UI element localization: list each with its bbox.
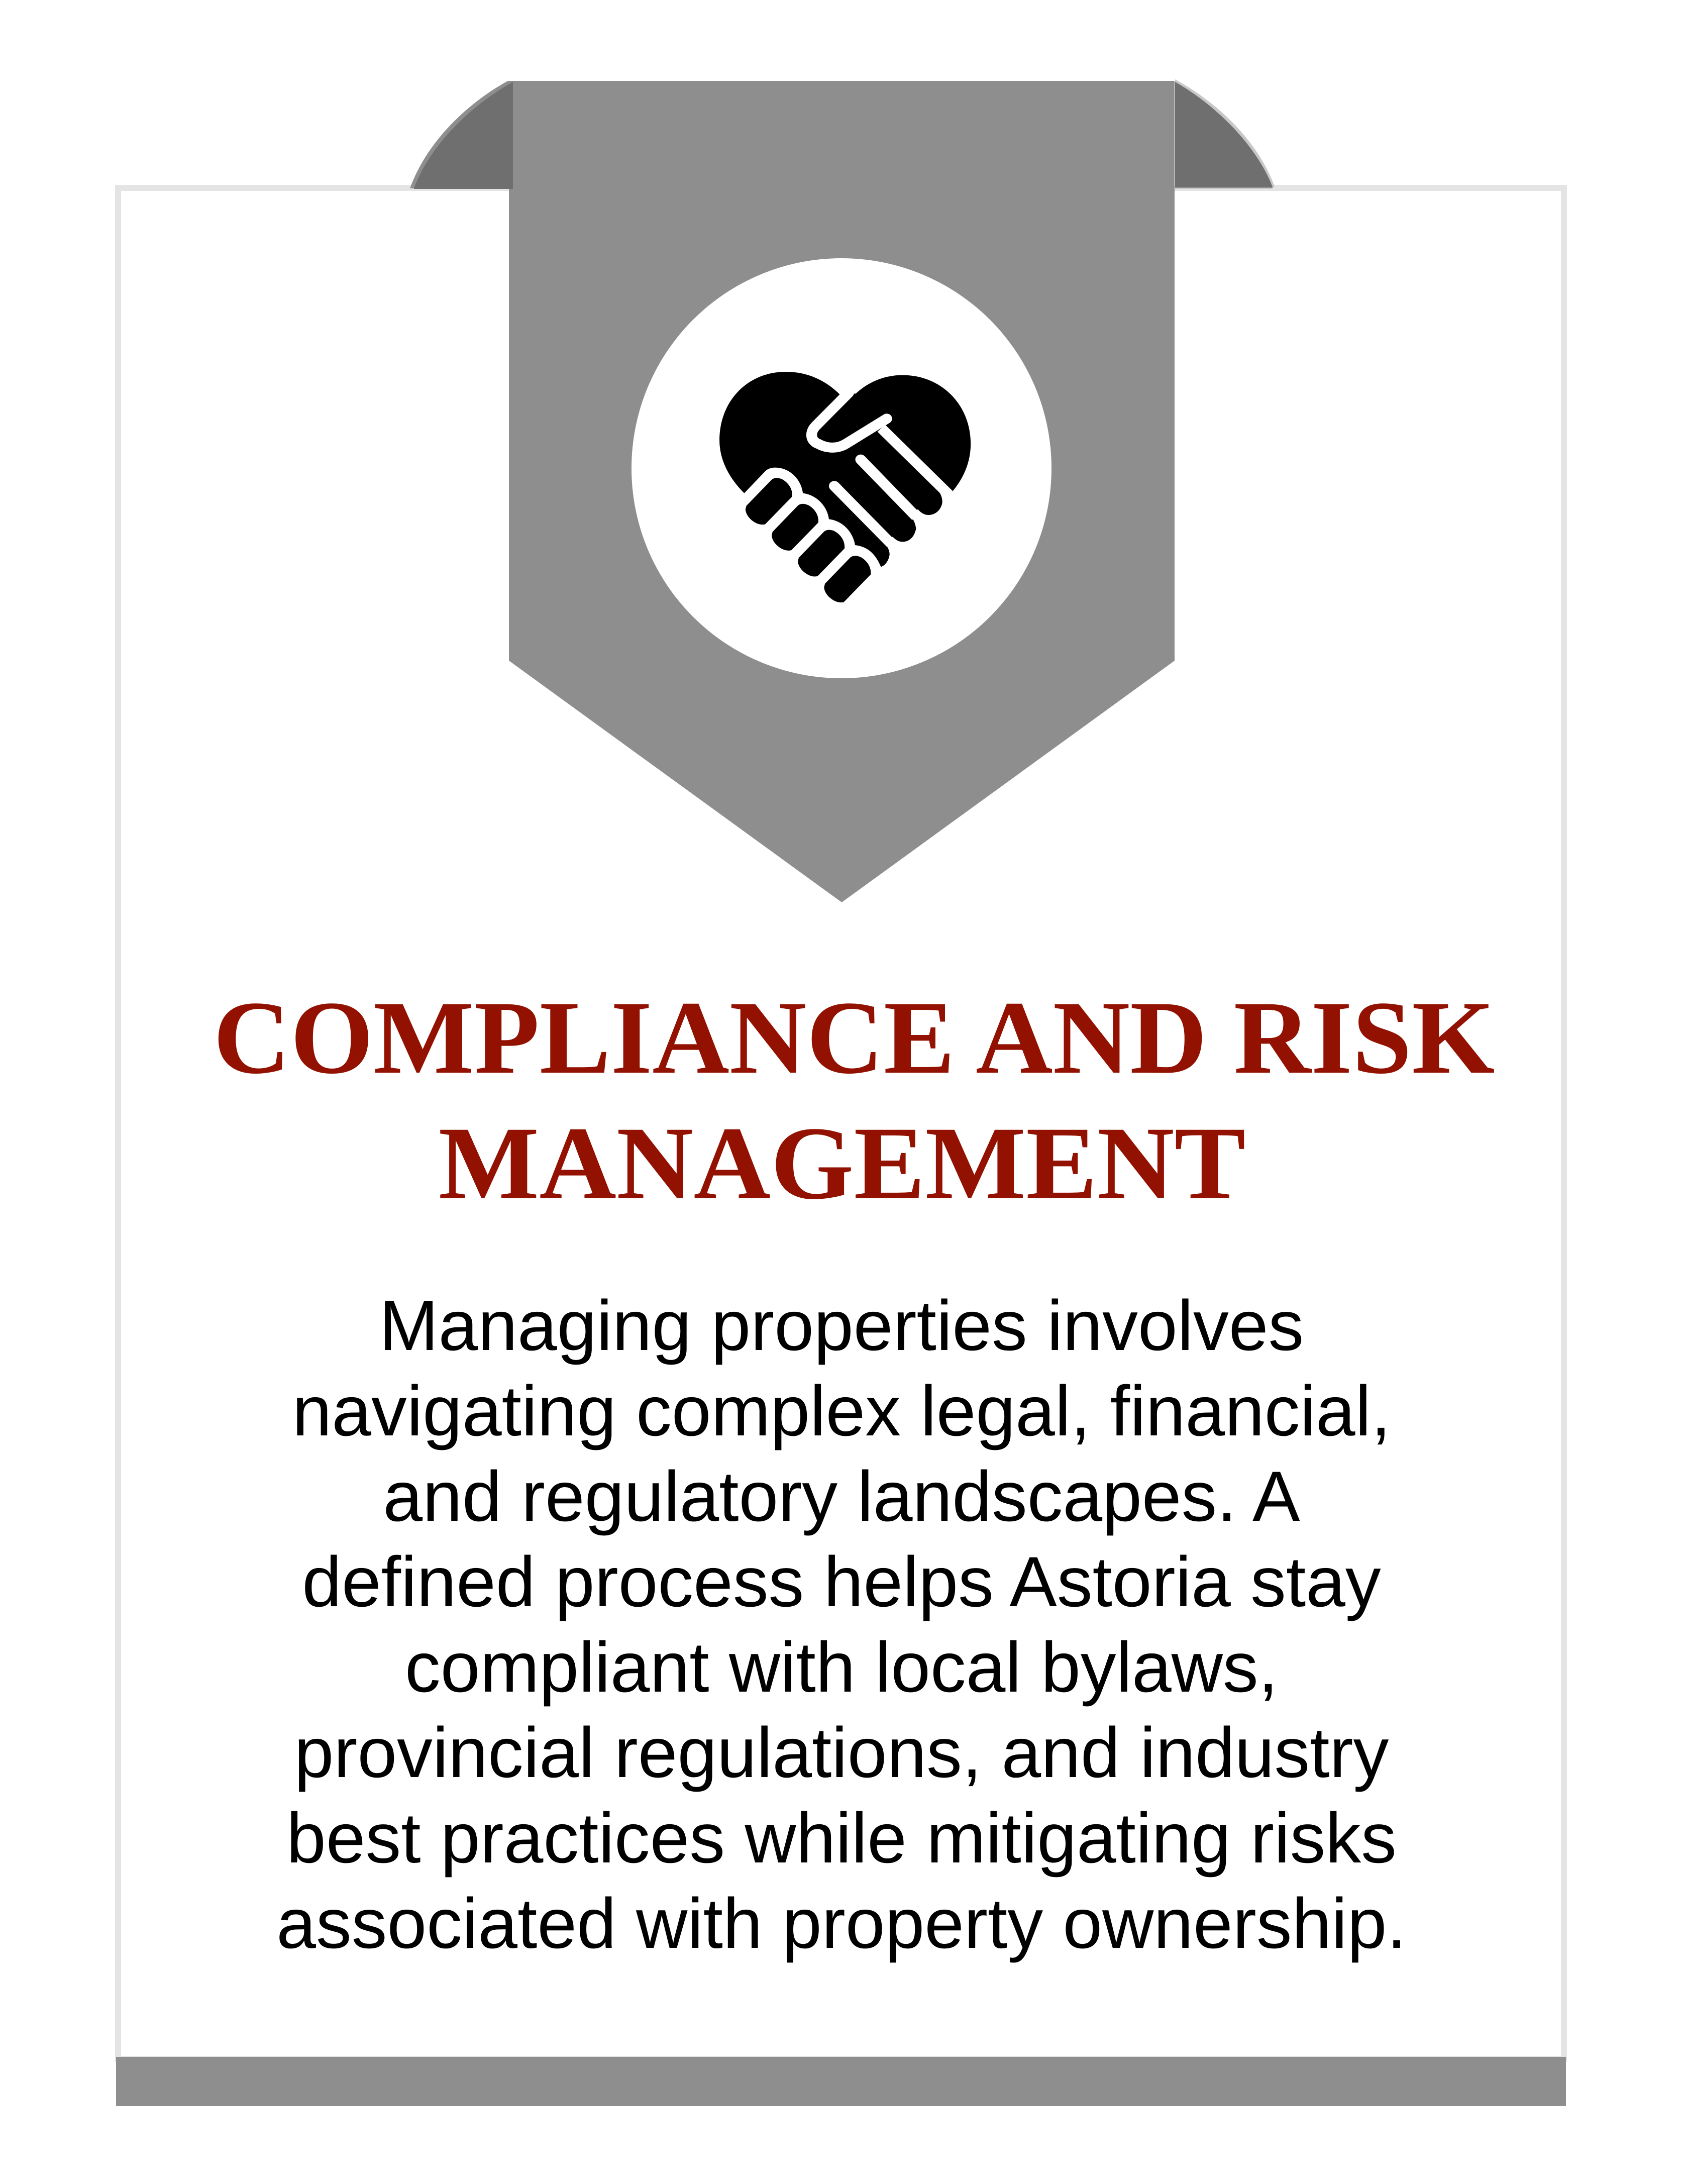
bottom bar — [116, 2057, 1566, 2106]
ribbon fold: left — [410, 81, 513, 189]
icon circle — [632, 258, 1051, 678]
body text: best practices while mitigating risks — [286, 1798, 1397, 1878]
panel: card frame — [115, 185, 1567, 2062]
body text: and regulatory landscapes. A — [383, 1457, 1300, 1536]
body text: navigating complex legal, financial, — [292, 1371, 1391, 1450]
title: COMPLIANCE AND RISK — [213, 980, 1495, 1095]
title: MANAGEMENT — [439, 1105, 1245, 1221]
body text: defined process helps Astoria stay — [302, 1542, 1381, 1621]
icon: handshake heart — [719, 372, 971, 602]
body text: compliant with local bylaws, — [405, 1627, 1278, 1707]
body text: provincial regulations, and industry — [294, 1713, 1389, 1792]
body text: Managing properties involves — [379, 1286, 1304, 1365]
ribbon fold: right — [1175, 79, 1275, 188]
ribbon banner — [509, 81, 1175, 902]
body text — [276, 1286, 1407, 1963]
title — [213, 980, 1495, 1221]
body text: associated with property ownership. — [276, 1884, 1407, 1963]
